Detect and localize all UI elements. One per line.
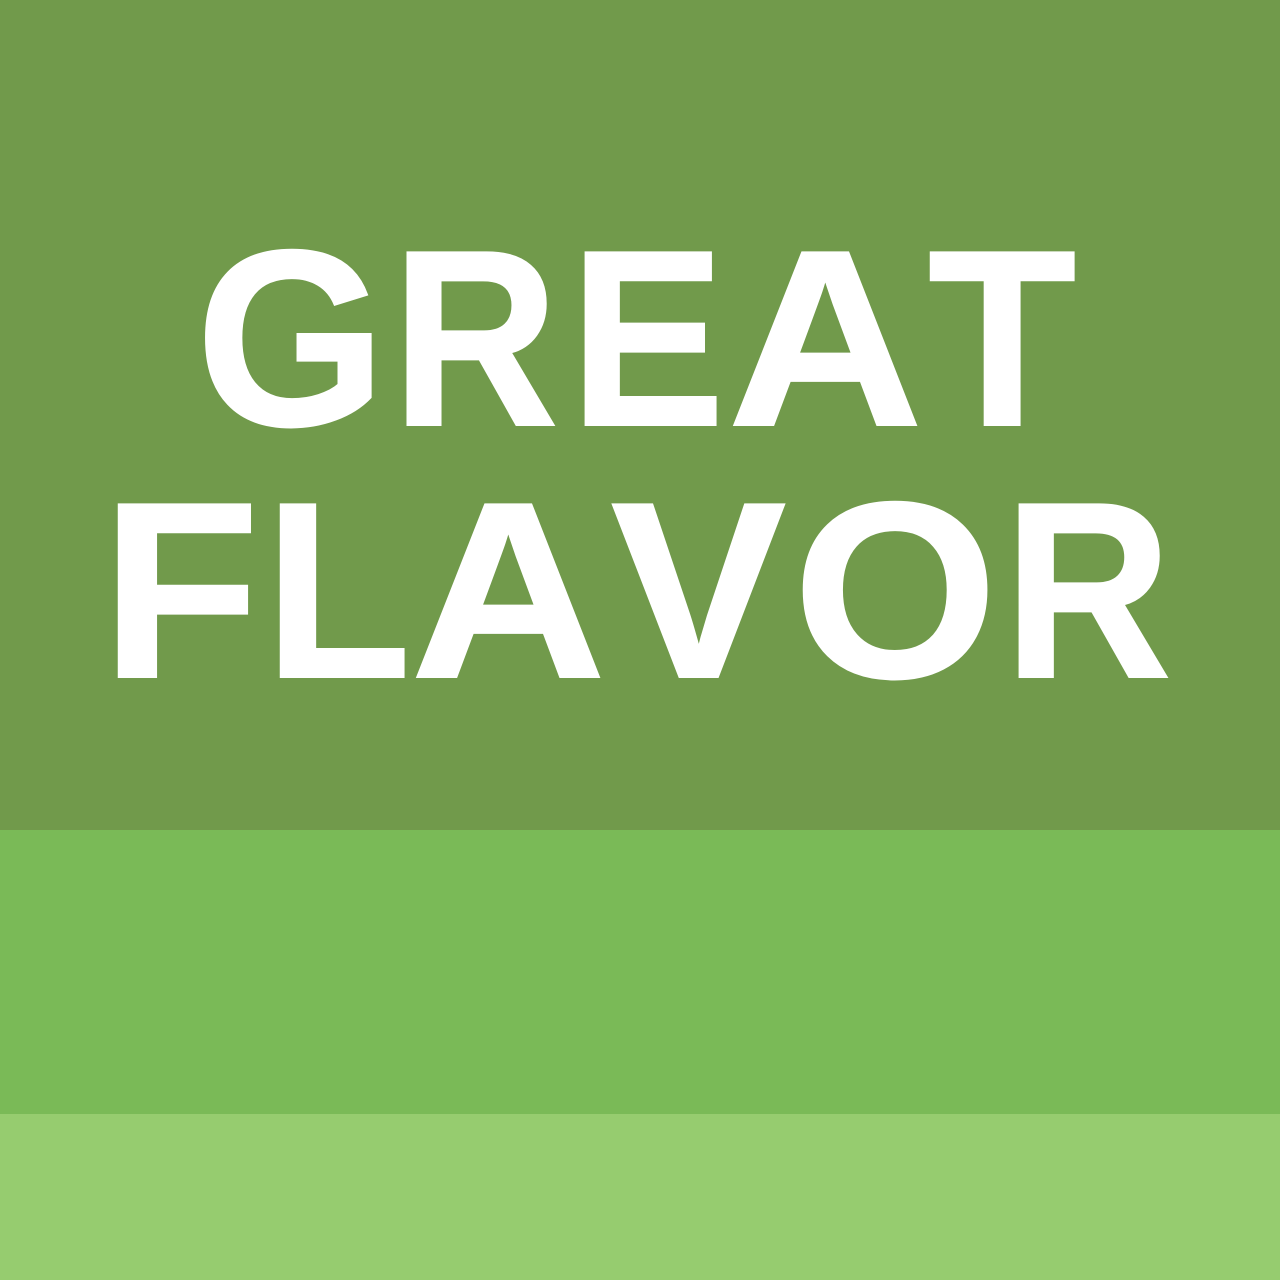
- panel: top dark green band: [0, 0, 1280, 830]
- title: GREAT FLAVOR: [102, 198, 1171, 731]
- heading line: FLAVOR: V: [611, 451, 787, 731]
- heading line: FLAVOR: [102, 449, 1171, 731]
- heading line: GREAT: T: [928, 198, 1076, 479]
- heading line: FLAVOR: R: [1004, 451, 1171, 731]
- heading line: GREAT: R: [392, 199, 558, 479]
- heading line: FLAVOR: F: [102, 449, 259, 730]
- heading line: GREAT: [196, 198, 1076, 479]
- panel: bottom light green band: [0, 1114, 1280, 1280]
- heading line: FLAVOR: O: [793, 450, 997, 731]
- heading line: GREAT: G: [196, 199, 386, 479]
- heading line: GREAT: A: [728, 199, 923, 479]
- heading line: GREAT: E: [570, 199, 725, 479]
- panel: middle green band: [0, 830, 1280, 1114]
- heading line: FLAVOR: L: [265, 450, 411, 730]
- heading line: FLAVOR: A: [411, 451, 606, 731]
